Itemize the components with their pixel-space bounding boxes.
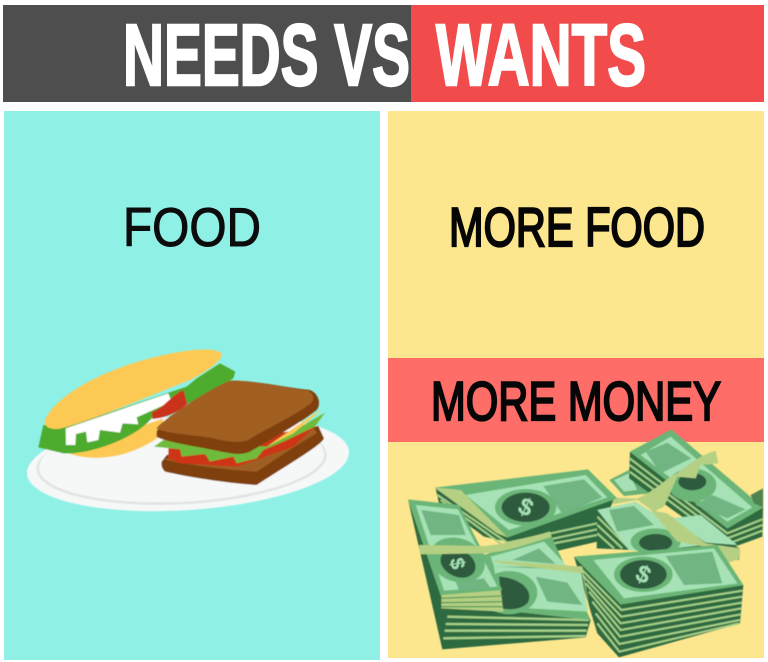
- title banner: [3, 5, 764, 104]
- band: more money: [388, 358, 764, 442]
- illustration: sandwiches on plate: [24, 350, 352, 521]
- bundle: bottom left: [408, 499, 591, 649]
- sandwich: toast: [154, 381, 325, 485]
- heading: food: FOOD: [123, 196, 261, 258]
- panel: wants: [388, 111, 764, 658]
- bundle: back centre: [435, 469, 617, 552]
- bundle: bottom left: $: [445, 556, 468, 571]
- sandwich: roll: [38, 350, 235, 458]
- bundle: back right: [597, 429, 763, 549]
- title: needs vs: NEEDS VS: [123, 7, 410, 104]
- bundle: bottom right: $: [631, 560, 655, 590]
- bundle: bottom right: [574, 545, 743, 657]
- plate: [24, 404, 352, 521]
- illustration: stacks of money: [408, 429, 763, 657]
- bundle: back middle: [597, 502, 740, 563]
- bundle: back centre: $: [514, 492, 537, 523]
- title: wants: WANTS: [436, 7, 646, 104]
- panel: needs: [4, 111, 380, 660]
